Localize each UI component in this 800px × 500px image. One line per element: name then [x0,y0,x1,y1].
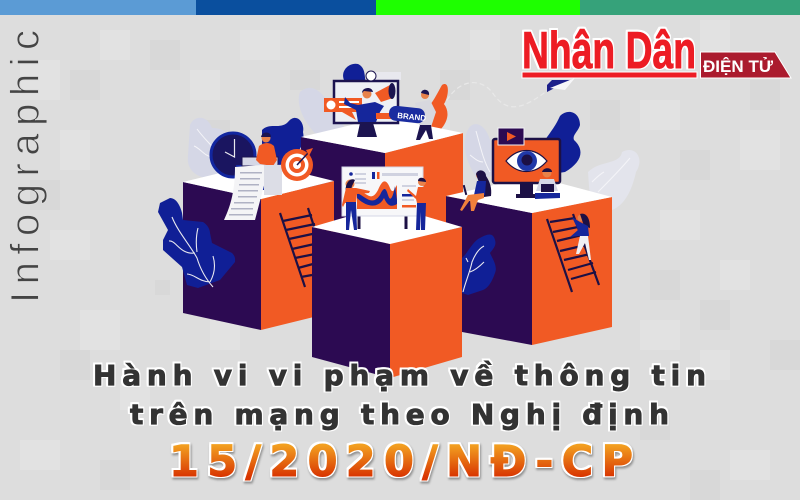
illustration: isometric blocks with people [158,64,639,378]
title line 2: trên mạng theo Nghị định [130,398,669,431]
paper plane [547,78,575,92]
decorative pale leaves [188,88,639,222]
back blue leaves [262,64,580,175]
title [93,359,706,487]
block: right [446,176,612,345]
block: left [183,163,334,330]
BRAND presenter [388,90,436,140]
blue leaf on right block [462,234,496,295]
person with laptop and paper scroll [224,132,282,220]
presentation board with chart [342,167,423,229]
title line 1: Hành vi vi phạm về thông tin [93,359,706,392]
presenter man [407,178,428,230]
blue leaf on left block [158,198,235,288]
orange leaf [430,84,448,130]
presenter woman [342,179,370,230]
icon: right ladder [547,214,599,292]
seated person with laptop on right [535,168,560,199]
climbing person [570,214,591,260]
logo wordmark: Nhân Dân [522,22,696,80]
eye [506,150,547,172]
monitor with eye [493,128,560,198]
block: centre front [312,205,462,378]
video tile [498,128,524,145]
block: top centre [301,117,463,260]
top colour bar [0,0,800,15]
icon: clock [211,133,255,177]
seated person with laptop [460,170,491,211]
chart [357,181,397,209]
icon: left ladder [280,208,320,287]
logo tag [700,52,791,78]
monitor with megaphone presenter [324,71,401,137]
decree number: 15/2020/NĐ-CP [169,437,633,487]
dashed flight path [440,83,548,115]
BRAND presenter: BRAND [397,111,427,123]
vertical label: Infographic: Infographic [4,30,48,303]
logo tag: ĐIỆN TỬ [703,57,774,76]
logo: Nhân Dân điện tử [522,22,791,80]
icon: target with dart [281,148,313,181]
